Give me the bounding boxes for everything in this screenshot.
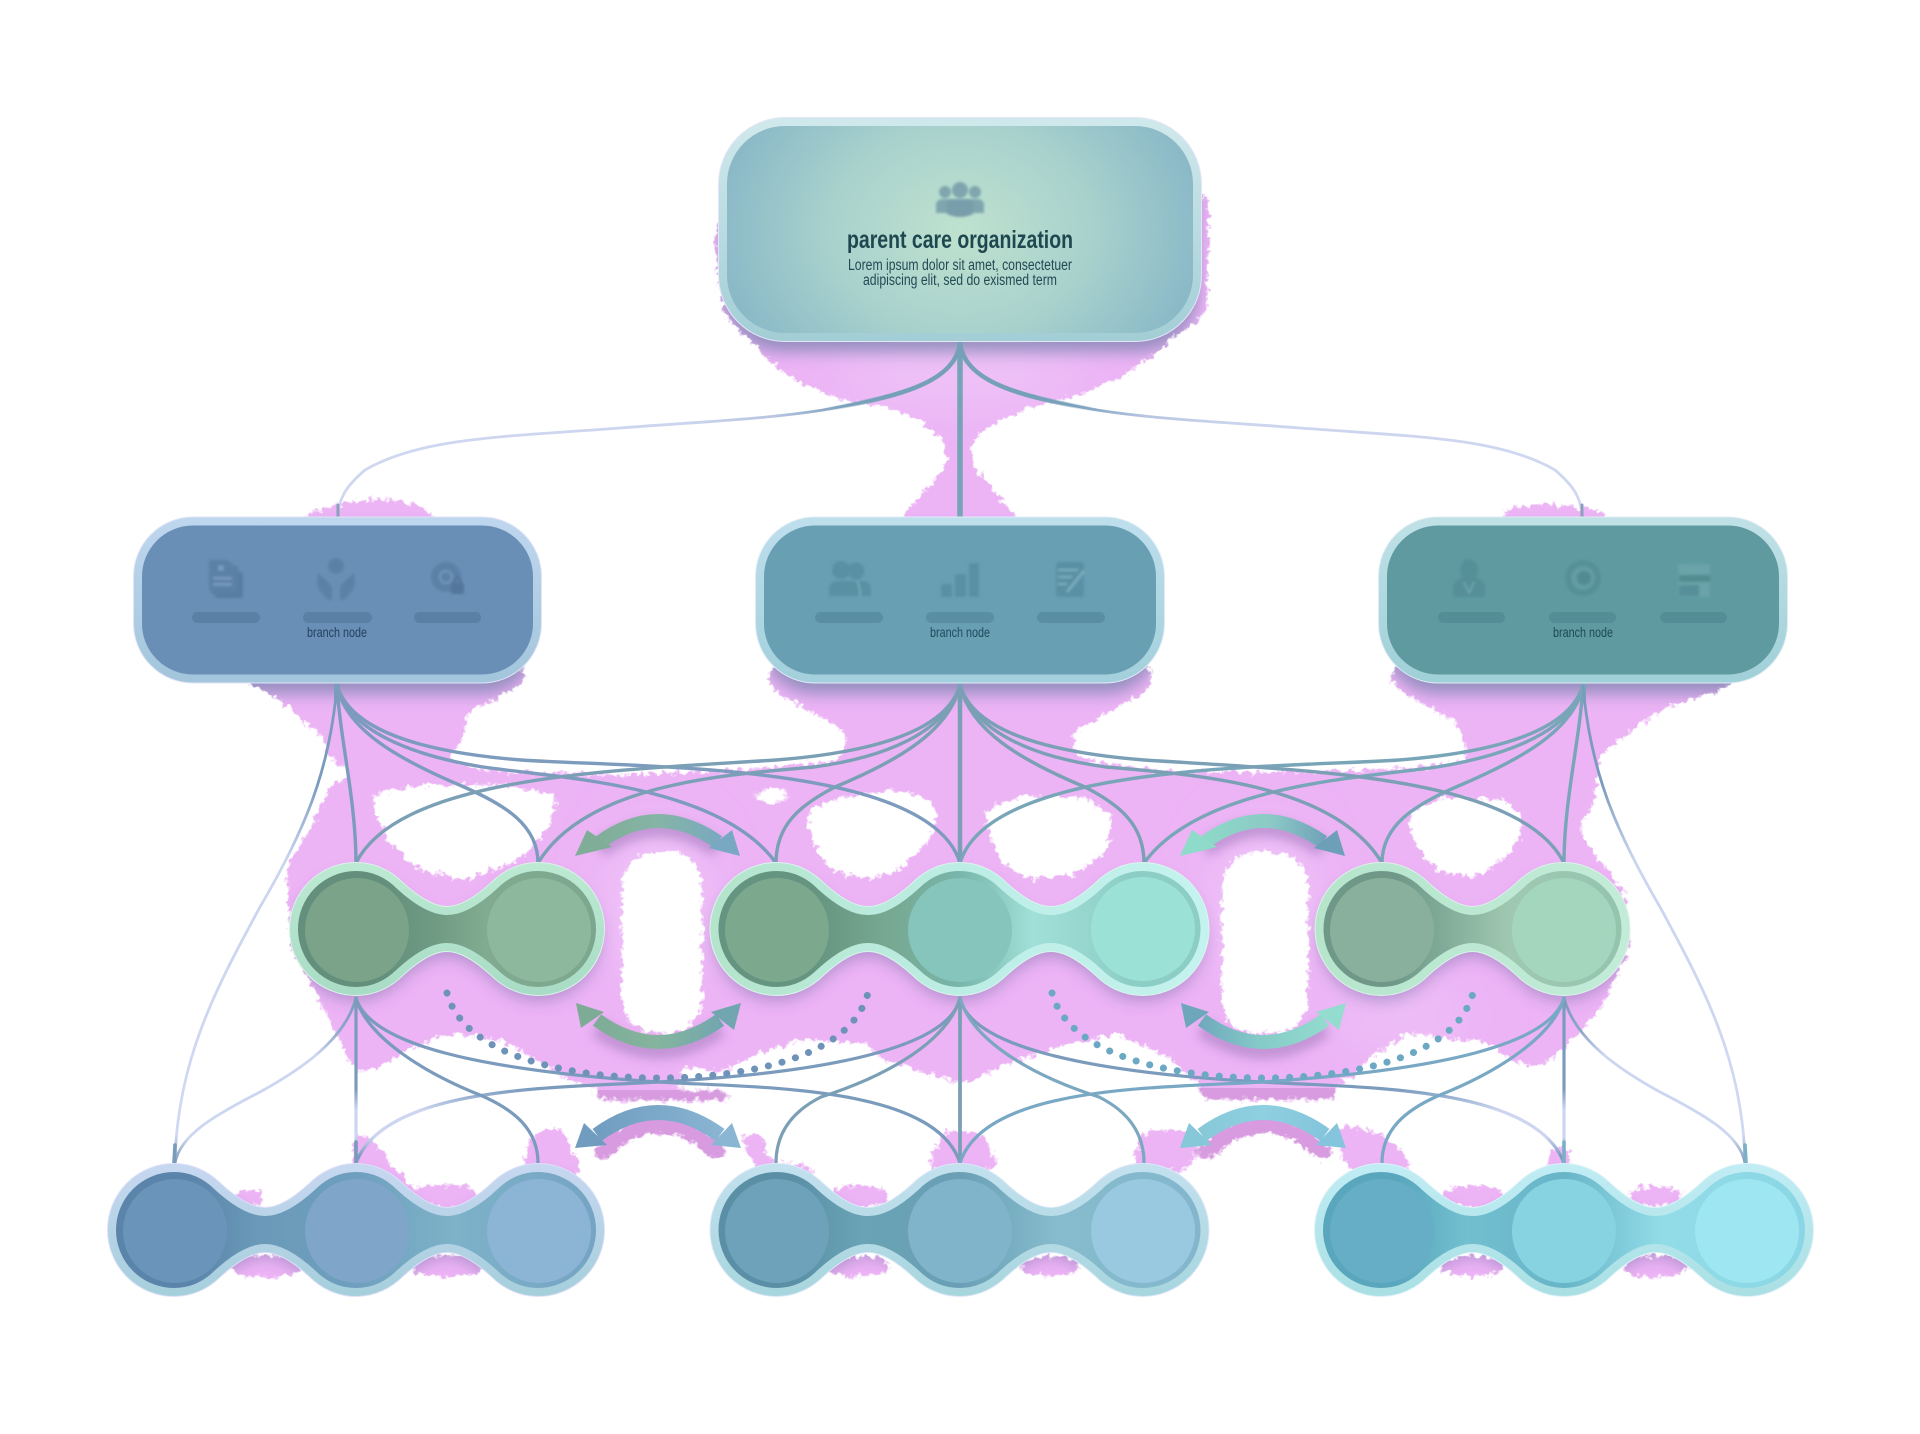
middle capsule 1 bbox=[294, 867, 600, 991]
icon: people group bbox=[936, 182, 984, 217]
icon: table grid bbox=[1678, 564, 1710, 597]
pink background wash bbox=[230, 193, 1732, 1280]
double arrow: left gap, bottom row bbox=[575, 1112, 741, 1148]
middle capsule 2 bbox=[714, 867, 1204, 991]
panel: branch node left bbox=[138, 522, 537, 678]
heading: parent care organization bbox=[847, 226, 1073, 254]
icon: bar chart bbox=[941, 563, 979, 597]
label bars bbox=[1438, 612, 1727, 623]
panel: parent care organization bbox=[723, 122, 1197, 337]
icon: note and pen bbox=[1056, 562, 1084, 597]
icon: person with tie bbox=[1453, 559, 1485, 597]
bottom capsule 1 bbox=[112, 1168, 600, 1292]
double arrow: right gap, bottom row bbox=[1180, 1112, 1346, 1148]
description line 2: adipiscing elit, sed do exismed term bbox=[863, 272, 1057, 289]
double arrow: right gap, upper bbox=[1180, 821, 1345, 856]
panel: branch node centre bbox=[760, 522, 1160, 678]
icon: gear bbox=[1565, 560, 1601, 596]
connector lines: middle row to bottom row bbox=[174, 998, 1746, 1163]
branch label: branch node bbox=[930, 624, 990, 640]
icon: two people bbox=[829, 561, 871, 597]
double arrow: right gap, lower bbox=[1181, 1003, 1346, 1042]
description line 1: Lorem ipsum dolor sit amet, consectetuer bbox=[848, 257, 1072, 274]
icon: gear with lock bbox=[431, 562, 464, 594]
double arrow: left gap, lower bbox=[576, 1003, 741, 1042]
branch label: branch node bbox=[307, 624, 367, 640]
dotted arc right bbox=[1052, 993, 1473, 1078]
double arrow: left gap, upper bbox=[575, 821, 740, 856]
panel: branch node right bbox=[1383, 522, 1783, 678]
connector lines: branches to middle row bbox=[175, 685, 1745, 1160]
label bars bbox=[192, 612, 481, 623]
connector lines: top card to branches bbox=[338, 343, 1582, 518]
dotted arc left bbox=[447, 993, 868, 1078]
branch label: branch node bbox=[1553, 624, 1613, 640]
label bars bbox=[815, 612, 1105, 623]
icon: document stack bbox=[209, 560, 243, 598]
bottom capsule 2 bbox=[714, 1168, 1204, 1292]
middle capsule 3 bbox=[1320, 867, 1626, 991]
icon: caring hands bbox=[317, 558, 355, 600]
bottom capsule 3 bbox=[1319, 1168, 1809, 1292]
